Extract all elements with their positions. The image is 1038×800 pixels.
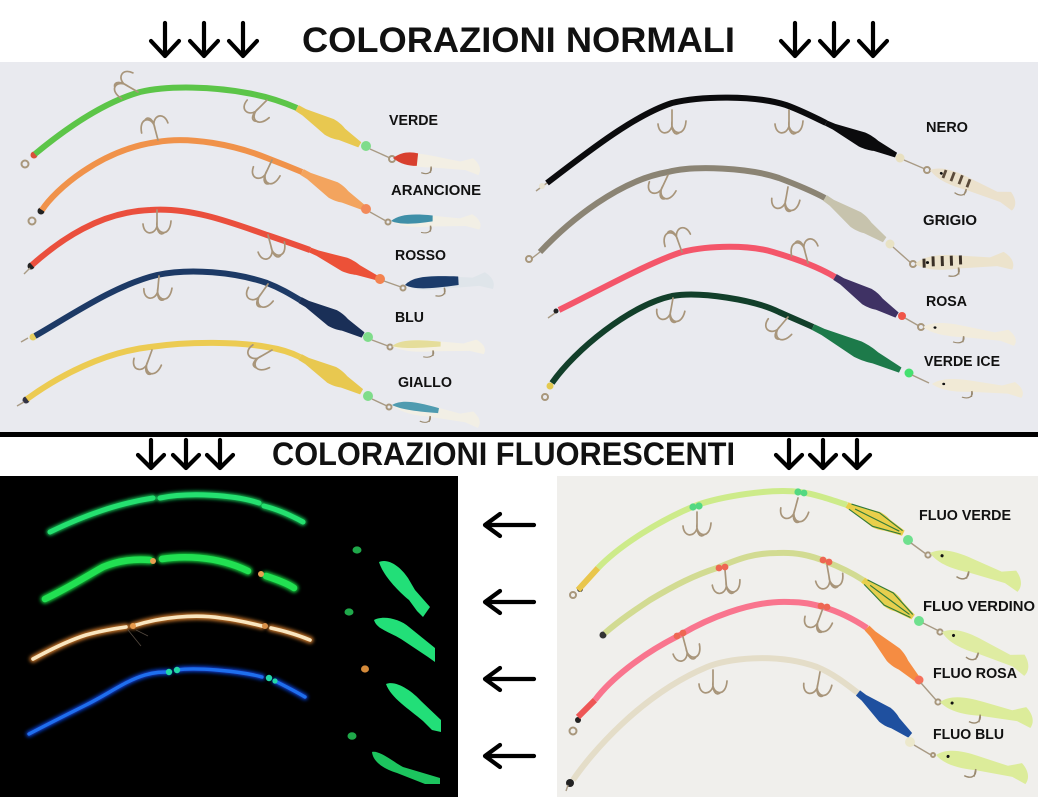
labels: normal colours right: GRIGIO <box>923 213 977 229</box>
arrows: top right down arrows <box>781 23 887 56</box>
lure: fluo verdino <box>936 623 1033 681</box>
hooks: giallo <box>131 338 279 377</box>
panel: fluorescent glow in the dark photo <box>0 476 458 797</box>
sinker: arancione <box>298 164 367 215</box>
sinker: fluo rosa <box>861 622 924 686</box>
tube: fluo verde <box>578 491 847 590</box>
labels: fluorescent colours: FLUO BLU <box>933 727 1004 743</box>
labels: normal colours left: BLU <box>395 310 424 326</box>
arrows: bottom right down arrows <box>776 440 870 468</box>
tube: blu <box>35 272 300 336</box>
labels: normal colours left: ROSSO <box>395 248 446 264</box>
labels: fluorescent colours: FLUO VERDE <box>919 508 1011 524</box>
labels: normal colours right <box>923 120 1000 370</box>
hooks: nero <box>658 110 803 134</box>
lure: fluo blu <box>933 745 1031 789</box>
labels: fluorescent colours <box>919 508 1035 743</box>
title: colorazioni normali: COLORAZIONI NORMALI <box>302 21 735 60</box>
hooks: arancione <box>138 113 285 188</box>
rig: fluo rosa <box>570 602 1035 734</box>
rig: giallo <box>17 338 482 432</box>
panel: fluorescent daylight photo <box>557 476 1038 797</box>
labels: fluorescent colours: FLUO ROSA <box>933 666 1018 682</box>
title: colorazioni fluorescenti: COLORAZIONI FLUORESCENTI <box>272 436 735 472</box>
tube: fluo rosa <box>578 602 867 717</box>
rig: nero <box>536 98 1019 215</box>
rig: fluo verdino <box>600 553 1033 681</box>
lure: blu <box>392 339 485 358</box>
lure: rosso <box>405 272 494 298</box>
hooks: fluo blu <box>699 670 834 698</box>
sinker: fluo verde <box>843 497 907 541</box>
beads and hooks: fluo rosa <box>669 603 836 664</box>
glowing lures <box>372 561 441 784</box>
labels: normal colours left: VERDE <box>389 113 438 129</box>
lure: grigio <box>915 252 1014 278</box>
sinker: grigio <box>820 191 890 247</box>
tube: arancione <box>42 140 302 210</box>
rig: fluo verde <box>570 488 1025 598</box>
tube: grigio <box>540 168 825 252</box>
lure: fluo verde <box>925 544 1025 597</box>
hooks: verde <box>110 68 277 127</box>
arrows: top left down arrows <box>151 23 257 56</box>
labels: normal colours right: ROSA <box>926 294 968 310</box>
hooks: rosso <box>143 210 288 262</box>
lure: giallo <box>390 397 482 432</box>
sinker: verde ice <box>809 319 904 378</box>
hooks: rosa <box>661 225 822 267</box>
sinker: fluo verdino <box>858 573 918 624</box>
sinker: rosso <box>307 243 380 285</box>
glow rig: first glowing tube <box>50 495 303 532</box>
lure: verde ice <box>931 376 1024 402</box>
labels: normal colours right: NERO <box>926 120 968 136</box>
lure: fluo rosa <box>937 692 1035 733</box>
sinker: fluo blu <box>852 686 916 742</box>
rig: verde <box>22 68 481 179</box>
arrows: left pointing arrows <box>485 514 534 767</box>
lure: arancione <box>391 213 481 233</box>
glow rig: third glowing tube <box>33 616 310 659</box>
labels: normal colours left: ARANCIONE <box>391 183 481 199</box>
glow rig: second glowing tube <box>45 557 294 599</box>
labels: normal colours left: GIALLO <box>398 375 452 391</box>
tube: giallo <box>27 343 300 399</box>
lure: verde <box>392 150 481 179</box>
divider bar <box>0 432 1038 437</box>
hooks: blu <box>143 275 279 312</box>
rig: grigio <box>526 168 1014 278</box>
tube: fluo verdino <box>605 553 863 633</box>
labels: normal colours right: VERDE ICE <box>924 354 1000 370</box>
lure: nero <box>925 162 1019 215</box>
hooks: verde ice <box>655 296 799 344</box>
rig: rosa <box>548 225 1017 350</box>
glowing beads <box>344 546 369 740</box>
sinker: blu <box>296 292 367 343</box>
rig: fluo blu <box>566 658 1031 791</box>
tube: verde ice <box>552 295 813 383</box>
rig: rosso <box>24 210 494 298</box>
tube: nero <box>547 98 826 183</box>
panel: normal colours left photo <box>0 62 510 432</box>
labels: fluorescent colours: FLUO VERDINO <box>923 599 1035 615</box>
arrows: bottom left down arrows <box>138 440 233 468</box>
tube: verde <box>35 88 297 154</box>
hooks: grigio <box>645 169 802 213</box>
rig: blu <box>21 272 485 358</box>
tube: rosso <box>32 210 310 265</box>
glow rig: fourth glowing tube <box>29 667 305 734</box>
tube: rosa <box>559 247 835 310</box>
sinker: rosa <box>830 269 902 323</box>
panel: normal colours right photo <box>510 62 1038 432</box>
rig: arancione <box>28 113 481 233</box>
sinker: nero <box>823 116 899 162</box>
sinker: verde <box>292 100 364 153</box>
labels: normal colours left <box>389 113 481 391</box>
sinker: giallo <box>296 349 366 400</box>
beads and hooks: fluo verdino <box>711 557 845 595</box>
beads and hooks: fluo verde <box>683 488 812 536</box>
rig: verde ice <box>542 295 1024 402</box>
lure: rosa <box>922 319 1017 350</box>
tube: fluo blu <box>573 658 858 780</box>
